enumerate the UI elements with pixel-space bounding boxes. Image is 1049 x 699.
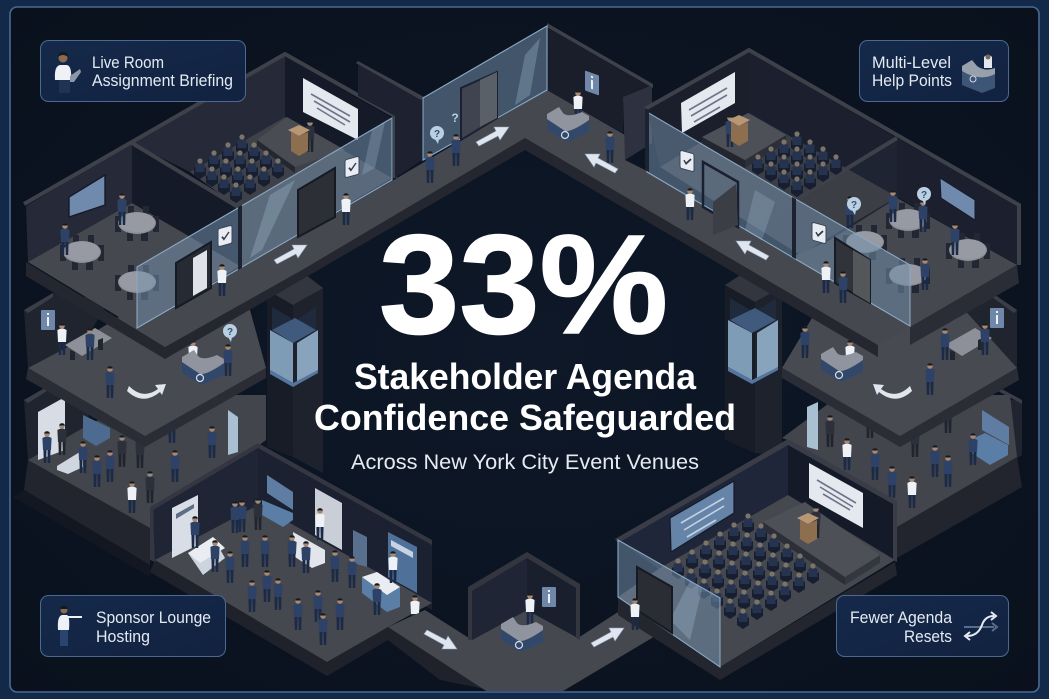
presenter [811,506,821,538]
receptionist [188,342,198,355]
auditorium floor [190,117,392,268]
receptionist [573,90,583,122]
info sign [585,70,599,96]
card: multi-level help points [860,40,1008,102]
white screen [809,463,863,528]
staff member [685,188,695,220]
level 2 right: help point [782,293,1019,447]
attendee with question: ? [434,129,440,140]
blue booth [83,415,110,446]
auditorium floor [660,113,897,255]
stage [257,117,345,173]
level 2 left: help point [24,293,266,447]
banner stand [38,397,65,460]
blue booth [970,410,1009,465]
attendee with question [451,111,461,166]
presenter [305,120,315,152]
question bubble [917,187,931,205]
curved arrow [873,384,912,399]
level 3 left: expo floor [24,389,266,565]
subtitle: Across New York City Event Venues [351,451,699,474]
direction arrow [591,628,624,647]
card: sponsor lounge hosting [40,596,226,656]
left elevator [267,272,323,473]
icon: rerouted arrows [964,612,997,640]
info sign [542,587,556,607]
attendee [838,271,848,303]
podium [288,125,310,156]
staff member [821,261,831,293]
side door [228,410,238,455]
meeting room floor [28,203,240,328]
audience seating [672,513,819,629]
wall mounted screen [69,175,105,217]
staff member [341,193,351,225]
door [835,238,870,303]
audience seating [194,134,284,203]
reception desk [182,350,224,385]
staff member [217,264,227,296]
wall mounted screen [940,178,975,220]
staff at door [630,598,640,630]
wall top rims [645,50,1019,265]
card label: Help Points [872,72,952,90]
card label: Fewer Agenda [850,609,953,627]
door [461,72,497,140]
question bubble [847,197,861,215]
question bubble: ? [921,190,927,201]
receptionist [845,340,855,356]
glass mullion [238,205,242,270]
glass wall [423,26,547,160]
presenter [725,115,735,147]
headline title line 1: Stakeholder Agenda [354,356,697,397]
headline stat: 33% [379,205,668,363]
work table [57,323,112,360]
staff [800,326,935,395]
icon: person with tablet [55,52,81,93]
side door [807,402,818,450]
door [703,162,738,235]
check sign [218,225,232,247]
staff [105,344,233,398]
question bubble: ? [851,200,857,211]
card label: Resets [904,628,952,646]
check sign [812,222,826,244]
attendee with question [425,126,444,183]
attendees [190,498,420,645]
podium [728,115,750,146]
bottom-centre help point and corridor [388,552,662,699]
stage [763,502,880,585]
direction arrow [476,127,509,146]
glass mullion [792,197,796,259]
blue screen [670,481,734,552]
icon: help desk [962,54,995,93]
question bubble: ? [227,327,233,338]
slab edge [910,265,1019,345]
staff member [605,131,615,163]
question bubble [223,324,237,342]
check sign [680,150,694,172]
top-centre corridor section [356,23,653,183]
card label: Multi-Level [872,54,951,72]
door [298,168,335,237]
attendee with question: ? [451,111,459,125]
right elevator [725,270,782,455]
info sign [41,310,55,330]
level 3 right: expo floor [782,387,1022,558]
door [637,567,672,633]
attendees [826,415,978,508]
headline title line 2: Confidence Safeguarded [314,397,736,438]
glass wall [647,112,910,326]
central corridor floor [26,90,910,359]
podium [797,513,819,544]
glass front [618,540,720,667]
door [176,242,211,308]
glass wall [137,118,392,328]
top-left suite [24,54,395,328]
stage [702,113,786,168]
reception desk [821,347,863,382]
top-right suite [645,50,1019,345]
info sign [990,308,1004,328]
attendees [42,423,216,513]
card label: Assignment Briefing [92,72,233,90]
meeting tables [843,190,990,293]
direction arrow [585,154,618,173]
bottom-right auditorium [615,439,897,680]
icon: person pointing [58,606,82,646]
wall top rims [24,54,395,207]
card label: Sponsor Lounge [96,609,211,627]
direction arrow [274,245,307,264]
card label: Hosting [96,628,150,646]
card label: Live Room [92,54,164,72]
reception desk [501,617,543,652]
mullion [645,108,649,172]
direction arrow [736,241,769,260]
reception desk [547,107,589,142]
sponsor booths [172,475,417,612]
check sign [345,156,359,178]
curved arrow [127,384,166,399]
presentation screen [681,72,735,133]
card: live room assignment briefing [40,40,246,102]
card: fewer agenda resets [836,596,1008,656]
work table [940,323,992,360]
exhibitor desk [57,452,83,474]
audience seating [752,131,842,197]
presentation screen [303,78,358,140]
meeting room floor [792,198,1017,327]
meeting tables [60,193,159,300]
direction arrow [424,630,457,649]
receptionist [525,593,535,625]
bottom-left sponsor lounge [150,443,500,692]
